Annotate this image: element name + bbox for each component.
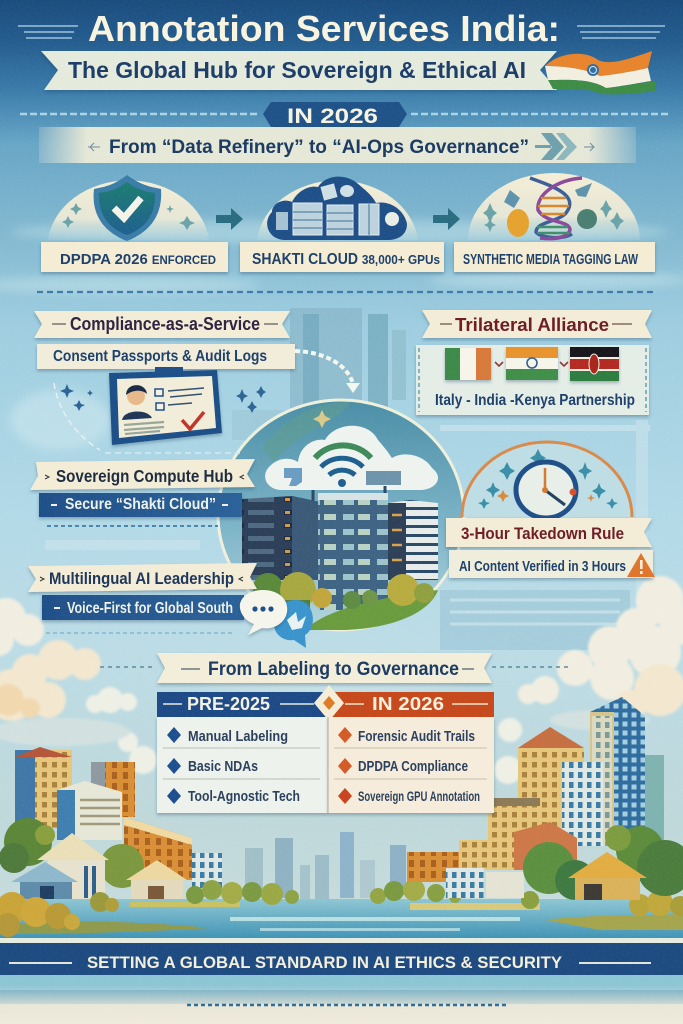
dome: DNA backdrop [468,173,640,240]
trees and grass [253,572,438,630]
background clouds [0,576,683,784]
ribbon: sovereign compute hub: Sovereign Compute Hub [56,466,233,486]
label [41,242,228,272]
subtitle ribbon: The Global Hub for Sovereign & Ethical AI [68,57,526,83]
city: left trees and houses [0,818,187,900]
arrow [433,208,460,230]
column: pre-2025: Manual Labeling [188,728,288,745]
banner: from data refinery to AI-Ops governance: From “Data Refinery” to “AI-Ops Governance” [109,136,529,158]
column: in 2026: Forensic Audit Trails [358,729,475,745]
ribbon: trilateral alliance [422,310,652,338]
text box: secure Shakti Cloud [39,493,242,517]
arrow: dashed curved [295,351,360,393]
heading ribbon: from labeling to governance: From Labeling to Governance [208,659,459,680]
flag: Italy [445,348,491,380]
city: left buildings [15,747,222,890]
icon: double chevron arrow [535,133,577,160]
background: ghost towers and data panels [45,308,650,650]
house [126,860,187,880]
subtitle ribbon [41,51,557,90]
column: in 2026: DPDPA Compliance [358,759,468,775]
city: right buildings [407,697,664,898]
icon: shield [94,175,161,241]
arrow [216,208,243,230]
label: SHAKTI CLOUD 38,000+ GPUs [252,251,440,268]
dashed divider [47,525,218,527]
icon: centre diamond [314,685,344,721]
comparison table [157,685,494,813]
panel: trilateral flags: Italy - India -Kenya Partnership [435,392,635,409]
data centre buildings [242,493,438,610]
ribbon: 3-hour takedown rule: 3-Hour Takedown Rule [461,524,624,543]
column: in 2026: Sovereign GPU Annotation [358,789,480,804]
ribbon: compliance-as-a-service: Compliance-as-a-Service [70,314,260,334]
house [568,852,647,878]
label: DPDPA 2026 ENFORCED [60,251,216,268]
river [0,899,683,939]
dashed divider with year badge: IN 2026 [287,105,378,128]
orb [218,400,464,630]
heading ribbon: from labeling to governance [100,653,570,683]
icon: cloud servers [267,177,407,240]
column: in 2026 [328,692,494,813]
text box: consent passports and audit logs [37,344,295,369]
flag: India [506,347,558,380]
central hub illustration [218,400,464,630]
city: right trees and house [523,825,683,900]
footer banner [0,938,683,975]
ribbon: multilingual AI leadership [28,563,257,592]
text box: voice-first for global south: Voice-First for Global South [67,600,233,617]
foliage along the river [0,879,683,937]
text box: voice-first for global south [42,595,244,620]
icon: Indian flag [545,51,655,94]
ribbon: 3-hour takedown rule [446,518,652,547]
dome: shield backdrop [48,180,209,240]
dashed divider with year badge [20,102,668,128]
banner: from data refinery to AI-Ops governance [39,127,636,163]
column: pre-2025: PRE-2025 [187,694,270,714]
column: pre-2025: Basic NDAs [188,758,258,775]
distant skyline [245,832,406,899]
panel: trilateral flags [416,345,649,415]
dashed divider [37,291,653,293]
ribbon: trilateral alliance: Trilateral Alliance [455,314,609,335]
text box: consent passports and audit logs: Consent Passports & Audit Logs [53,348,267,365]
panel: synthetic media tagging law [454,173,655,272]
column: in 2026: IN 2026 [372,694,444,714]
text box: AI content verified: AI Content Verified in 3 Hours [459,558,626,575]
ribbon: sovereign compute hub [30,459,255,490]
house [37,833,109,860]
icon: ID card with sparkles [54,367,266,453]
icon: link mark between flags [495,362,568,366]
text box: secure Shakti Cloud: Secure “Shakti Cloud” [65,496,216,513]
label [240,242,444,272]
icon: clock in arch [462,442,632,518]
background: mottled haze [0,220,683,692]
ribbon: compliance-as-a-service [34,311,290,338]
column: pre-2025: Tool-Agnostic Tech [188,788,300,805]
panel: DPDPA 2026 enforced [41,175,228,272]
dashed divider [46,632,235,634]
footer banner: SETTING A GLOBAL STANDARD IN AI ETHICS & SECURITY [87,953,563,972]
icon: speech bubbles [240,590,313,648]
title: Annotation Services India: [88,8,560,49]
column: pre-2025 [157,692,328,813]
text box: AI content verified [449,550,653,578]
icon: DNA helix [530,178,582,239]
ribbon: multilingual AI leadership: Multilingual AI Leadership [49,569,234,588]
label [454,242,655,272]
dome: cloud backdrop [257,180,418,240]
flag: Kenya [570,347,619,381]
panel: Shakti Cloud GPUs [240,177,444,272]
icon: warning triangle [627,553,655,577]
footer base with dotted line [0,975,683,1024]
cloud with wifi [265,426,438,508]
